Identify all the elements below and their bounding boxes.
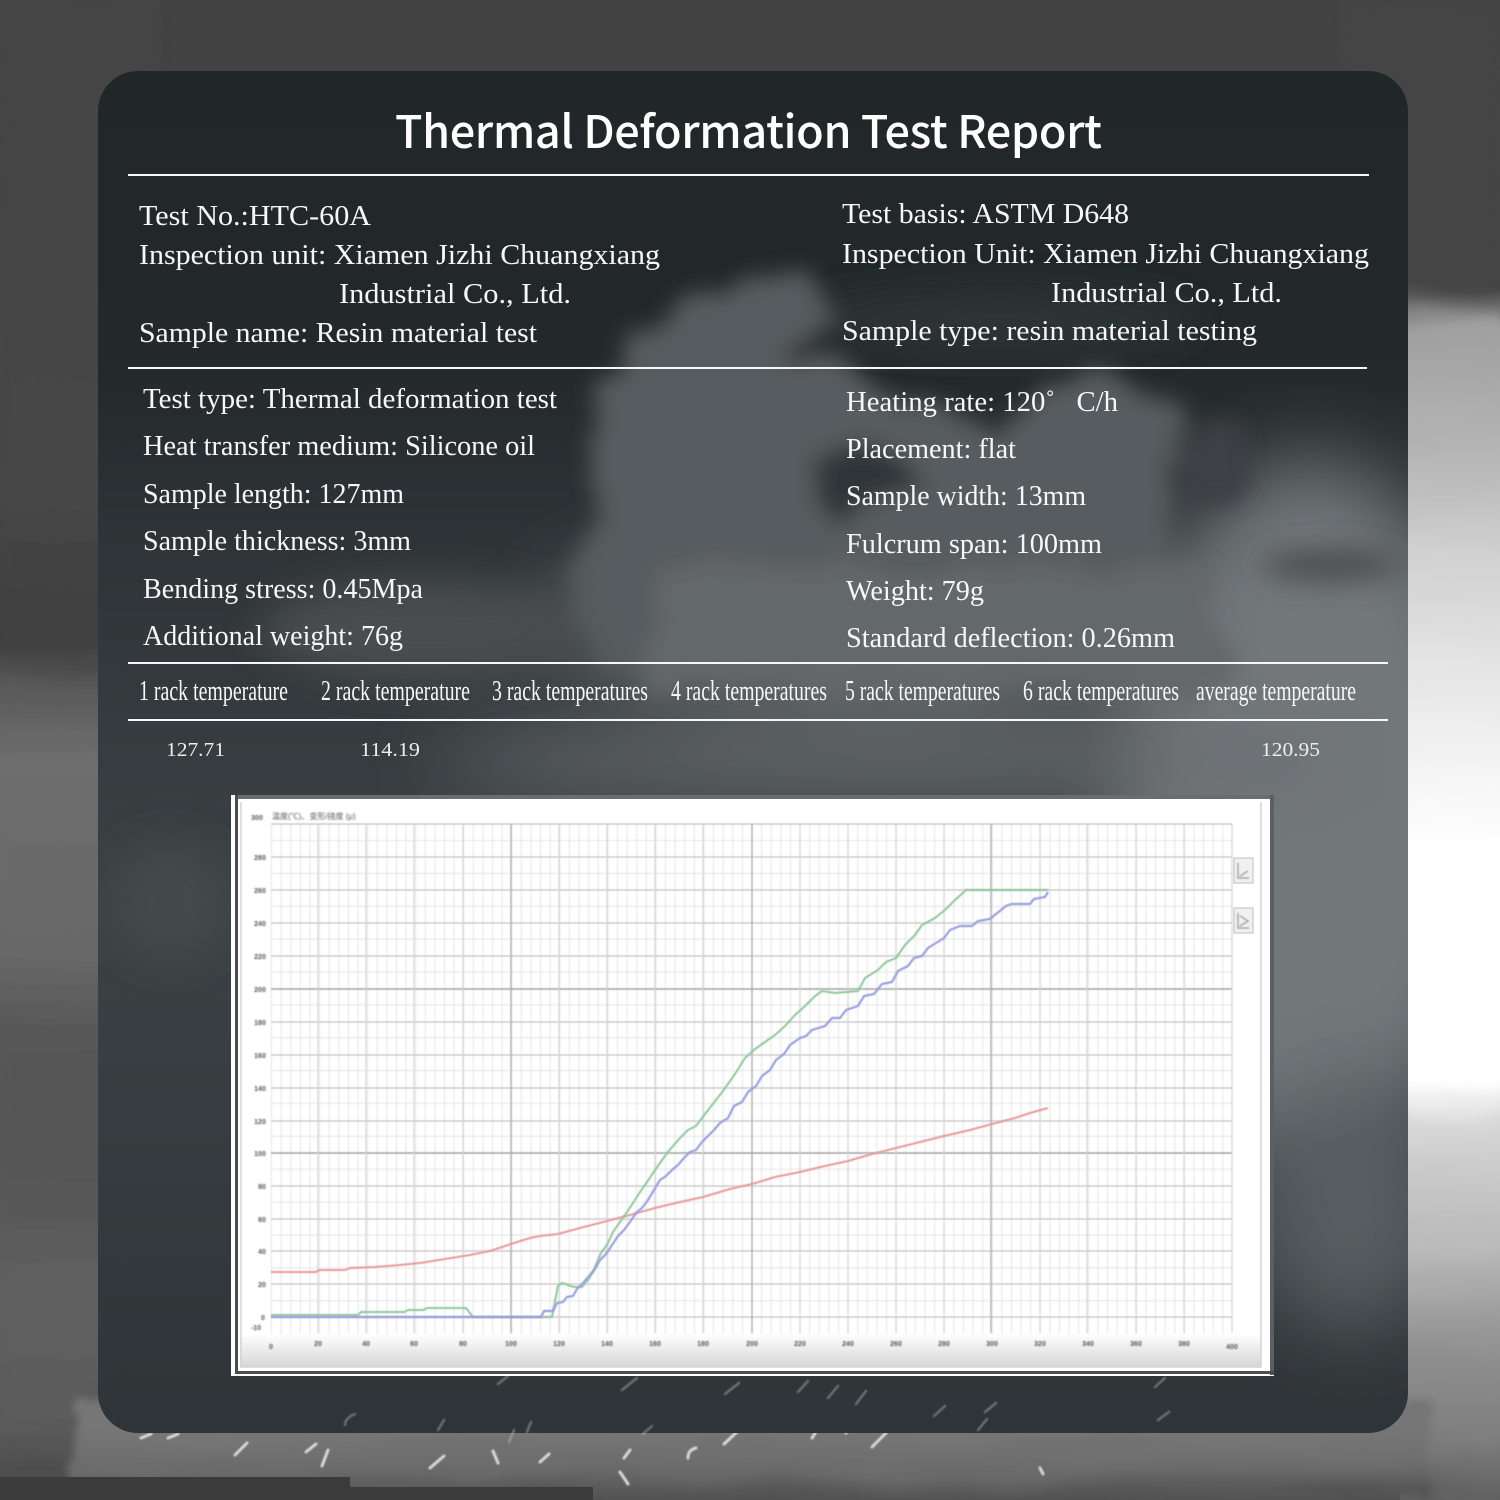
table header: rack temperatures: 2 rack temperature bbox=[321, 675, 470, 707]
y axis labels: 140 bbox=[254, 1086, 266, 1093]
x axis labels: 220 bbox=[794, 1341, 806, 1348]
x axis labels: 60 bbox=[410, 1341, 418, 1348]
text block: test info left: Industrial Co., Ltd. bbox=[339, 278, 571, 310]
x axis labels: 140 bbox=[601, 1341, 613, 1348]
x axis labels: 100 bbox=[505, 1341, 517, 1348]
text block: test info left bbox=[139, 200, 660, 349]
text block: test parameters left: Heat transfer medium: Silicone oil bbox=[143, 430, 535, 462]
y axis labels: 160 bbox=[254, 1053, 266, 1060]
y axis labels: 300 bbox=[251, 815, 263, 822]
text block: test parameters left: Additional weight: 76g bbox=[143, 620, 403, 652]
y axis labels: 200 bbox=[254, 987, 266, 994]
text block: test info right: Inspection Unit: Xiamen Jizhi Chuangxiang bbox=[842, 238, 1369, 270]
x axis labels: 200 bbox=[746, 1341, 758, 1348]
x axis labels: 0 bbox=[269, 1344, 273, 1351]
axis title: 温度(℃)、变形/挠度 (μ) bbox=[272, 811, 356, 821]
x axis labels: 20 bbox=[314, 1341, 322, 1348]
curve: red temperature bbox=[271, 1108, 1048, 1272]
x axis labels: 240 bbox=[842, 1341, 854, 1348]
table values bbox=[166, 739, 1320, 761]
text block: test info left: Sample name: Resin material test bbox=[139, 317, 537, 349]
y axis labels: 260 bbox=[254, 888, 266, 895]
text block: test parameters left: Sample thickness: 3mm bbox=[143, 525, 411, 557]
y axis labels: 220 bbox=[254, 954, 266, 961]
x axis labels bbox=[269, 1341, 1238, 1351]
x axis labels: 360 bbox=[1130, 1341, 1142, 1348]
text block: test info left: Inspection unit: Xiamen Jizhi Chuangxiang bbox=[139, 239, 660, 271]
table values: 114.19 bbox=[360, 739, 420, 761]
text block: test parameters right: Fulcrum span: 100mm bbox=[846, 528, 1102, 560]
text block: test info right bbox=[842, 198, 1369, 347]
y axis labels: 120 bbox=[254, 1119, 266, 1126]
x axis labels: 40 bbox=[362, 1341, 370, 1348]
curve: green deflection bbox=[271, 890, 1048, 1317]
text block: test parameters right: Placement: flat bbox=[846, 433, 1016, 465]
text block: test parameters right: Heating rate: 120˚ C/h bbox=[846, 386, 1118, 418]
text block: test info left: Test No.:HTC-60A bbox=[139, 200, 371, 232]
table header: rack temperatures: 3 rack temperatures bbox=[492, 675, 648, 707]
text block: test parameters right: Sample width: 13mm bbox=[846, 480, 1086, 512]
table header: rack temperatures: average temperature bbox=[1196, 675, 1356, 707]
x axis labels: 180 bbox=[697, 1341, 709, 1348]
y axis labels bbox=[251, 815, 266, 1332]
text block: test parameters left: Bending stress: 0.45Mpa bbox=[143, 573, 423, 605]
y axis labels: 20 bbox=[258, 1282, 266, 1289]
table header: rack temperatures: 4 rack temperatures bbox=[671, 675, 827, 707]
x axis labels: 400 bbox=[1226, 1344, 1238, 1351]
y axis labels: 80 bbox=[258, 1184, 266, 1191]
icon: zoom in button bbox=[1234, 858, 1253, 883]
chart: temperature and deflection curves bbox=[231, 795, 1274, 1376]
x axis labels: 300 bbox=[986, 1341, 998, 1348]
birds scattered along the bottom bbox=[141, 1424, 1043, 1484]
text block: test parameters left bbox=[143, 383, 557, 652]
y axis labels: -10 bbox=[251, 1325, 261, 1332]
text block: test parameters left: Sample length: 127mm bbox=[143, 478, 404, 510]
x axis labels: 80 bbox=[459, 1341, 467, 1348]
icon: zoom out button bbox=[1234, 908, 1253, 933]
text block: test parameters left: Test type: Thermal deformation test bbox=[143, 383, 557, 415]
x axis labels: 260 bbox=[890, 1341, 902, 1348]
y axis labels: 180 bbox=[254, 1020, 266, 1027]
birds seen through the panel bbox=[345, 1376, 1169, 1442]
y axis labels: 240 bbox=[254, 921, 266, 928]
table values: 120.95 bbox=[1261, 739, 1320, 761]
x axis labels: 340 bbox=[1082, 1341, 1094, 1348]
curve: blue deflection bbox=[271, 892, 1048, 1317]
x axis labels: 380 bbox=[1178, 1341, 1190, 1348]
text block: test parameters right: Standard deflection: 0.26mm bbox=[846, 622, 1175, 654]
table values: 127.71 bbox=[166, 739, 225, 761]
x axis labels: 320 bbox=[1034, 1341, 1046, 1348]
x axis labels: 120 bbox=[553, 1341, 565, 1348]
text block: test info right: Sample type: resin material testing bbox=[842, 315, 1257, 347]
text block: test info right: Test basis: ASTM D648 bbox=[842, 198, 1129, 230]
y axis labels: 60 bbox=[258, 1217, 266, 1224]
text block: test parameters right: Weight: 79g bbox=[846, 575, 984, 607]
y axis labels: 280 bbox=[254, 855, 266, 862]
text block: test parameters right bbox=[846, 386, 1175, 654]
y axis labels: 40 bbox=[258, 1249, 266, 1256]
table header: rack temperatures: 6 rack temperatures bbox=[1023, 675, 1179, 707]
y axis labels: 0 bbox=[261, 1315, 265, 1322]
x axis labels: 160 bbox=[649, 1341, 661, 1348]
text block: test info right: Industrial Co., Ltd. bbox=[1051, 277, 1282, 309]
x axis labels: 280 bbox=[938, 1341, 950, 1348]
title: Thermal Deformation Test Report bbox=[395, 96, 1102, 161]
table header: rack temperatures: 1 rack temperature bbox=[139, 675, 288, 707]
y axis labels: 100 bbox=[254, 1151, 266, 1158]
table header: rack temperatures bbox=[139, 675, 1356, 707]
table header: rack temperatures: 5 rack temperatures bbox=[845, 675, 1000, 707]
cloud mass in the centre of the panel bbox=[575, 268, 1250, 690]
